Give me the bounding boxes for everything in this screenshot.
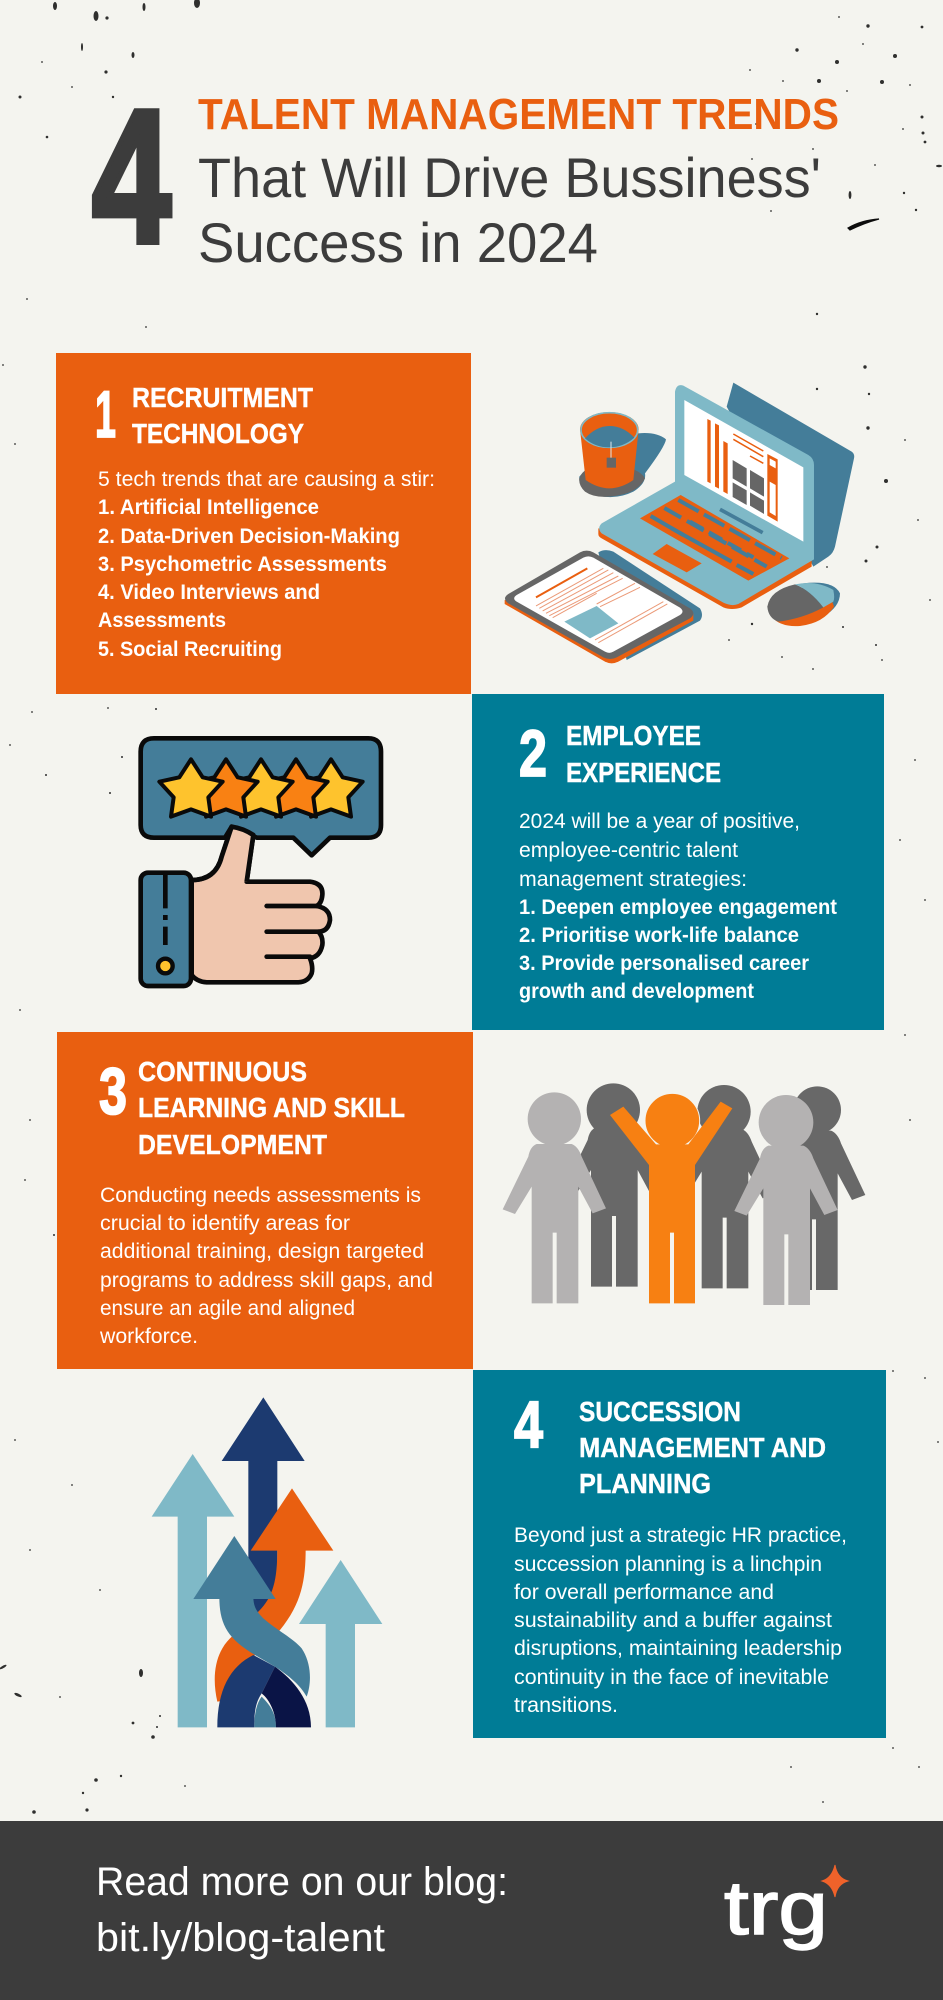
body text: crucial to identify areas for bbox=[100, 1212, 350, 1235]
body list: growth and development bbox=[519, 980, 754, 1003]
subtitle bbox=[198, 146, 821, 274]
body text: sustainability and a buffer against bbox=[514, 1609, 832, 1632]
heading: EXPERIENCE bbox=[566, 757, 721, 788]
icon: laptop, tablet, cup and mouse bbox=[505, 383, 854, 663]
panel: succession management and planning bbox=[473, 1370, 886, 1738]
body list: employee-centric talent bbox=[519, 839, 738, 862]
number 1: 1 bbox=[95, 377, 116, 451]
heading: PLANNING bbox=[579, 1468, 711, 1499]
cup with coaster bbox=[579, 412, 666, 497]
body text: transitions. bbox=[514, 1694, 618, 1717]
light arrows bbox=[152, 1454, 382, 1727]
footer band bbox=[0, 1821, 943, 2000]
body text: Conducting needs assessments is bbox=[100, 1184, 421, 1207]
footer call to action bbox=[96, 1860, 508, 1960]
laptop bbox=[598, 383, 854, 609]
navy arrow bbox=[222, 1397, 305, 1613]
body list: 5 tech trends that are causing a stir: bbox=[98, 468, 435, 491]
body text: Beyond just a strategic HR practice, bbox=[514, 1524, 847, 1547]
panel: employee experience bbox=[472, 694, 884, 1030]
orange person with raised arms bbox=[610, 1093, 732, 1303]
heading: DEVELOPMENT bbox=[138, 1129, 327, 1160]
heading: LEARNING AND SKILL bbox=[138, 1092, 405, 1123]
heading bbox=[132, 382, 313, 449]
body list: 3. Provide personalised career bbox=[519, 952, 809, 975]
body text bbox=[99, 1184, 433, 1348]
footer call to action: Read more on our blog: bbox=[96, 1860, 508, 1904]
body text: additional training, design targeted bbox=[100, 1240, 424, 1263]
mouse bbox=[767, 583, 840, 626]
body list: 1. Artificial Intelligence bbox=[98, 496, 319, 519]
heading: SUCCESSION bbox=[579, 1396, 741, 1427]
body text: continuity in the face of inevitable bbox=[514, 1666, 829, 1689]
body list bbox=[519, 810, 837, 1003]
number 4: 4 bbox=[514, 1387, 543, 1461]
speech bubble with stars bbox=[141, 738, 381, 855]
body text: for overall performance and bbox=[514, 1581, 774, 1604]
body list: 5. Social Recruiting bbox=[98, 638, 282, 661]
icon: thumbs up with star rating bbox=[141, 738, 381, 986]
body text: ensure an agile and aligned bbox=[100, 1297, 355, 1320]
sleeve bbox=[141, 873, 191, 986]
heading bbox=[566, 720, 721, 788]
subtitle: Success in 2024 bbox=[198, 211, 598, 274]
body text: programs to address skill gaps, and bbox=[100, 1269, 433, 1292]
body list: 2024 will be a year of positive, bbox=[519, 810, 800, 833]
body list: 3. Psychometric Assessments bbox=[98, 553, 387, 576]
heading: RECRUITMENT bbox=[132, 382, 313, 413]
orange arrow bbox=[215, 1488, 333, 1702]
body list: Assessments bbox=[98, 609, 226, 632]
heading: CONTINUOUS bbox=[138, 1056, 307, 1087]
body list: 4. Video Interviews and bbox=[98, 581, 320, 604]
body list bbox=[98, 468, 435, 661]
heading: EMPLOYEE bbox=[566, 720, 701, 751]
dark people bbox=[562, 1083, 865, 1290]
number 3: 3 bbox=[99, 1054, 127, 1128]
subtitle: That Will Drive Bussiness' bbox=[198, 146, 821, 209]
logo: trg: trg bbox=[724, 1866, 828, 1951]
heading: TECHNOLOGY bbox=[132, 418, 304, 449]
title bbox=[198, 91, 839, 274]
body text: succession planning is a linchpin bbox=[514, 1553, 822, 1576]
tablet bbox=[505, 550, 702, 663]
panel: recruitment technology bbox=[56, 353, 471, 694]
dark ribbon bbox=[262, 1667, 311, 1727]
body list: 1. Deepen employee engagement bbox=[519, 896, 837, 919]
body list: 2. Data-Driven Decision-Making bbox=[98, 525, 400, 548]
thumb over bubble edge bbox=[210, 827, 253, 882]
heading bbox=[138, 1056, 405, 1160]
footer call to action: bit.ly/blog-talent bbox=[96, 1916, 385, 1960]
body list: 2. Prioritise work-life balance bbox=[519, 924, 799, 947]
heading: MANAGEMENT AND bbox=[579, 1432, 826, 1463]
hand bbox=[192, 827, 330, 982]
big number 4: 4 bbox=[92, 71, 171, 283]
heading bbox=[579, 1396, 826, 1499]
title line: talent management trends: TALENT MANAGEMENT TRENDS bbox=[198, 91, 839, 139]
number 2: 2 bbox=[519, 716, 547, 790]
icon: intertwined rising arrows bbox=[152, 1397, 382, 1727]
light grey people bbox=[503, 1092, 838, 1305]
teal arrow bbox=[193, 1536, 310, 1727]
icon: group of people bbox=[503, 1083, 865, 1305]
navy ribbon bbox=[217, 1655, 275, 1727]
body list: management strategies: bbox=[519, 868, 747, 891]
body text bbox=[514, 1524, 847, 1717]
panel: continuous learning and skill development bbox=[57, 1032, 473, 1369]
body text: disruptions, maintaining leadership bbox=[514, 1637, 842, 1660]
body text: workforce. bbox=[99, 1325, 198, 1348]
